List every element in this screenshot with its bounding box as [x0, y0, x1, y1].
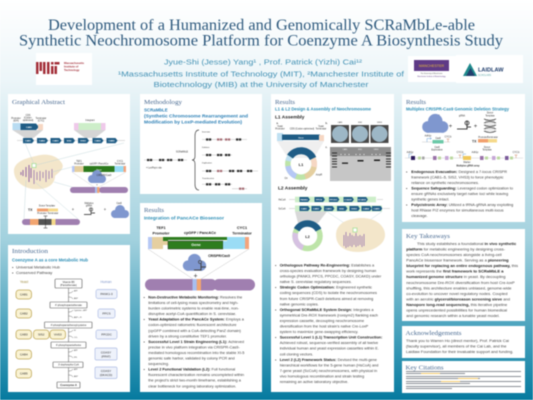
panel: introduction — [8, 245, 130, 392]
colony plates — [325, 121, 388, 143]
Cas9 icon: Cas9 — [116, 203, 122, 205]
heading: key takeaways: Key Takeaways — [406, 233, 450, 240]
icon: gRNA: gRNA — [459, 114, 466, 118]
L1 plasmid labels: Ori — [284, 177, 288, 180]
L1 plasmid labels: L1 — [299, 162, 304, 167]
acknowledgements body — [406, 338, 513, 354]
bullet list: neochromosome: native S. cerevisiae regulatory sequences. — [280, 280, 352, 284]
Cas9 expression cassette — [422, 134, 452, 152]
L1 construct: Promoter — [275, 128, 285, 130]
L1 plasmid labels — [284, 162, 323, 180]
bullet list: biosensor: Successful Level 1 Strain Engineering (L1): Achieved — [148, 340, 244, 344]
L2 gene rows: CAB3 — [326, 207, 332, 210]
cassette funnel left: optimized) — [23, 119, 34, 122]
citation lines — [406, 372, 521, 388]
Cas9 complex: + — [193, 273, 198, 280]
panel: biosensor results — [140, 203, 262, 392]
acknowledgements body: Thank you to Warren Ho (direct mentor), Prof. Patrick Cai — [406, 338, 509, 343]
bullet list: biosensor — [144, 296, 245, 388]
gel: SIS2 — [358, 149, 362, 151]
takeaways body: Nanopore long-read sequencing, this iterative pipeline — [406, 302, 508, 307]
title: Development of a Humanized and Genomically SCRaMbLe-able — [48, 17, 475, 34]
subheading: L1 & L2 Design & Assembly of Neochromosome — [275, 106, 372, 112]
human column: PANK1-3 — [100, 292, 113, 296]
human column: (DKACD) — [100, 373, 112, 377]
multiplex gRNA array: CYC1t — [457, 151, 464, 154]
yeast column: CAB2 — [20, 312, 28, 316]
multiplex gRNA array: Marker — [463, 161, 471, 164]
icon: donor DNA: + — [474, 124, 478, 130]
subheading: Integration of PancACe Biosensor — [144, 216, 224, 220]
bullet list: deletion strategy: reliance on synthetic neochromosomes. — [411, 181, 479, 185]
donor template — [28, 204, 75, 215]
SCRaMbLE diagram: Duplication — [202, 162, 212, 164]
bullet list: neochromosome: diversification from the host strain's native Cre-LoxP — [280, 324, 369, 328]
bullet list: neochromosome: orthologs (PANK3, PPCS, PPCDC, COASY, DCAKD) under — [280, 275, 382, 279]
biosensor construct: Gene — [96, 169, 103, 171]
gene arrow row: VHS3 — [80, 140, 87, 142]
donor template: Template — [482, 148, 492, 152]
donor template — [472, 136, 498, 152]
gene arrow row: SIS2 — [67, 140, 72, 142]
bullet list: biosensor: Level 2 Functional Validation (L2): Full functional — [148, 368, 235, 372]
human column: PPCDC — [101, 332, 113, 336]
bullet list: biosensor: • — [144, 296, 146, 300]
takeaways body: co-evolution to uncover novel regulatory nodes. Coupled — [406, 291, 508, 296]
bullet list: biosensor: Yeast Adaptation of the PancACe System: Employs a — [148, 318, 245, 322]
bullet list: neochromosome: vivo homologous recombination and strain testing — [280, 374, 364, 378]
Cas9 icon — [104, 203, 129, 218]
donor template: Terminator — [487, 136, 498, 139]
pathway: ADP — [74, 375, 79, 378]
bullet list: biosensor: (cpGFP combined with a CoA-detecting PanZ domain) — [148, 329, 242, 333]
pathway: Coenzyme A — [60, 383, 77, 387]
multiplex gRNA array: Adh1p — [472, 151, 479, 154]
pathway: ADP + Pi — [74, 316, 82, 319]
logo: MIT: Institute of — [64, 64, 78, 68]
gene arrow row: CAB1 — [25, 140, 32, 142]
L2 gene rows: VHS3 — [351, 208, 358, 210]
panel: graphical abstract — [8, 94, 130, 234]
biosensor construct: CRISPR/Cas9 — [97, 175, 112, 177]
cassette funnel left: (tDH) — [13, 120, 19, 122]
icon: Cas9: Cas9 — [434, 116, 440, 118]
SCRaMbLE diagram — [144, 130, 258, 190]
bullet list: Conserved Pathway — [16, 270, 53, 275]
bullet list: deletion strategy: host RNase P/Z enzymes for simultaneous multi-locus — [411, 208, 504, 212]
bullet list: deletion strategy: • — [406, 187, 408, 191]
takeaways body: opens unprecedented possibilities for human biomedical — [406, 308, 507, 312]
bullet list: biosensor: • — [144, 368, 146, 372]
gel — [326, 147, 391, 181]
biosensor construct: Promoter — [74, 162, 84, 166]
bullet list — [12, 264, 61, 275]
bullet list: neochromosome — [275, 264, 382, 384]
Cas9 complex: CRISPR/Cas9 — [208, 254, 230, 258]
SCRaMbLE definition: Modification by LoxP-mediated Evolution) — [144, 119, 243, 124]
L2 gene rows: SIS2 — [339, 208, 345, 210]
bullet list: neochromosome: symmetrical Dre-ROX framework (roxsym2) flanking each — [280, 313, 378, 317]
panel: key citations — [402, 361, 525, 393]
authors and affiliations: Biotechnology (MIB) at the University of Manchester — [154, 82, 369, 89]
authors and affiliations: Jyue-Shi (Jesse) Yang¹ , Prof. Patrick (Yizhi) Cai¹² — [164, 60, 363, 66]
Cas9 expression cassette: Cas9 — [435, 138, 441, 140]
bullet list: neochromosome: coli cloning vectors. — [280, 352, 313, 356]
construct labels: cpGFP / PancACe — [184, 231, 216, 235]
pathway: Vitamin B5 — [62, 281, 75, 284]
biosensor construct: + — [96, 184, 98, 186]
gRNA icon — [84, 202, 95, 214]
human column — [95, 280, 117, 378]
pathway: ATP — [74, 368, 78, 371]
gene arrow row: CAB5 — [109, 140, 115, 142]
bullet list: biosensor: codon-optimized ratiometric fluorescent architecture — [148, 323, 237, 327]
bullet list: neochromosome: Successful Level 1 (L1) Transcription Unit Construction: — [280, 336, 382, 340]
gel: VHS3 — [374, 149, 378, 151]
panel: neochromosome results — [271, 94, 394, 392]
yeast column — [16, 280, 66, 378]
takeaways body: platform for metabolic engineering by designing cross- — [406, 246, 506, 252]
bullet list: neochromosome: Level 2 (L2) Framework Status: Devised the multi-gene — [280, 358, 377, 362]
panel: acknowledgements — [402, 326, 525, 358]
pathway: PPi — [74, 357, 78, 359]
donor template: Terminator — [48, 212, 59, 215]
acknowledgements body: Laidlaw Foundation for their invaluable support and funding. — [406, 349, 513, 354]
donor template: Donor — [484, 146, 490, 149]
bullet list: biosensor: fluorescent characterization remains uncompleted within — [148, 373, 244, 377]
icon: donor DNA: Donor — [487, 112, 493, 114]
colony plates: VHS3 — [377, 122, 382, 124]
biosensor construct: Terminator — [115, 162, 126, 166]
heading: results: Results — [275, 99, 295, 106]
yeast column: Yeast — [20, 280, 28, 284]
takeaways body: species CoA neochromosomes alongside a living-cell — [406, 252, 502, 257]
SCRaMbLE definition — [144, 108, 248, 124]
pathway: Cysteine + ATP — [74, 309, 88, 312]
Cas9 expression cassette: Cas9 — [434, 147, 440, 149]
donor template: + — [72, 207, 75, 212]
icon: gRNA — [449, 114, 471, 130]
donor template: TX — [28, 208, 33, 212]
bullet list: neochromosome: expression cassette, decoupling neochromosome — [280, 319, 364, 323]
logo: MIT: Massachusetts — [64, 61, 84, 65]
Cas9 icon: + — [104, 207, 107, 212]
gel: c. — [326, 147, 328, 149]
SCRaMbLE definition: SCRaMbLE — [144, 108, 168, 112]
bullet list: biosensor: Non-Destructive Metabolic Monitoring: Resolves the — [148, 296, 242, 300]
bullet list: neochromosome: individual human and yeast expression cassettes within E. — [280, 347, 379, 351]
construct labels: Promoter — [153, 232, 170, 236]
takeaways body: humanized genome structure in yeast. By decoupling — [406, 274, 506, 279]
chromosome — [145, 279, 255, 290]
human column: Human — [101, 280, 112, 284]
multiplex gRNA array: Multiplex gRNA array — [456, 164, 480, 167]
bullet list: Universal Metabolic Hub — [16, 264, 61, 270]
L1 construct: CDS (Codon-optimized) — [290, 128, 314, 130]
bullet list: neochromosome: Strategic Codon Optimization: Engineered synthetic — [280, 286, 372, 290]
SCRaMbLE diagram: Inversion — [202, 132, 210, 134]
takeaways body: shuffling, this architecture enables unbiased, genome-wide — [406, 285, 512, 290]
gene construct — [148, 237, 249, 279]
Cas9 expression cassette: Expression — [431, 148, 443, 152]
bullet list: biosensor: limitations of cell-lysing mass spectrometry and high- — [148, 301, 239, 305]
L2 gene rows — [278, 197, 390, 229]
cassette funnel left: CAB1 — [26, 126, 33, 129]
cassette funnel left: CDS — [26, 115, 31, 117]
heading: results: Results — [144, 207, 164, 214]
chromosome: integration — [70, 187, 128, 193]
SCRaMbLE diagram: = LoxPsym site — [146, 166, 163, 170]
donor template: Promoter — [37, 212, 47, 215]
bullet list: biosensor: the project's strict two-month timeframe, establishing a — [148, 379, 242, 383]
gRNA icon: Multiplex — [84, 202, 94, 205]
bullet list: biosensor: sequencing. — [148, 362, 169, 366]
bullet list: deletion strategy: • — [406, 203, 408, 207]
yeast column: SIS2 — [38, 332, 45, 336]
bullet list: biosensor: driven by a strong constitutive TEF1 promoter. — [148, 334, 227, 338]
takeaways body: neochromosome Dre-ROX diversification from host Cre-loxP — [406, 280, 515, 285]
bullet list: neochromosome: • — [275, 286, 277, 290]
logo: MIT: Technology — [64, 68, 80, 72]
construct labels: CYC1 — [237, 226, 247, 230]
logo: Manchester: MANCHESTER — [419, 64, 444, 68]
biosensor construct: TEF1 — [76, 161, 83, 163]
bullet list: biosensor: • — [144, 340, 146, 344]
bullet list: deletion strategy: framework (CAB1–5, SIS2, VHS3) to force phenotypic — [411, 176, 503, 180]
L1 assembly heading: L1 Assembly — [275, 114, 305, 120]
yeast column: CAB5 — [20, 372, 28, 376]
heading: acknowledgements: Acknowledgements — [406, 330, 462, 337]
biosensor construct — [72, 161, 126, 187]
bullet list: deletion strategy: synthetic genes intact. — [411, 198, 449, 202]
yeast column: CAB3 — [20, 332, 28, 336]
construct labels: TEF1 — [156, 226, 166, 230]
colony plates: SIS2 — [358, 122, 362, 124]
colony plates: b. — [325, 123, 328, 125]
biosensor construct: cpGFP / PancACe — [90, 162, 109, 166]
bullet list: biosensor: burden colorimetric systems to enable real-time, non- — [148, 307, 240, 311]
bullet list: neochromosome: system to maximize gene-swapping efficiency. — [280, 330, 358, 334]
bullet list: deletion strategy: cleavage. — [411, 214, 428, 218]
L2 gene rows: CAB5 — [374, 207, 380, 210]
multiplex gRNA array — [405, 151, 523, 167]
Cas9 expression cassette: CYC1t — [445, 136, 452, 138]
L1 construct: Yeast — [318, 125, 324, 128]
bullet list: deletion strategy: • — [406, 170, 408, 174]
bullet list: biosensor: • — [144, 318, 146, 322]
colony plates: CAB1 — [338, 121, 342, 124]
bullet list: deletion strategy: ensure gRNAs exclusively target native loci while leaving — [411, 192, 508, 196]
bullet list: neochromosome: remaining an active laboratory objective. — [280, 380, 349, 384]
logo: Manchester: Manchester Institute of Biotechnology — [417, 75, 446, 78]
logo: Laidlaw — [456, 55, 523, 83]
authors and affiliations — [118, 60, 404, 89]
donor template: Donor Template — [39, 204, 56, 208]
L1 construct: Gene — [298, 138, 305, 140]
yeast column: CAB1 — [20, 292, 28, 296]
logo: MIT — [36, 53, 92, 85]
pathway: 4'-phosphopantothenoylcysteine — [51, 324, 87, 327]
bullet list: biosensor: mediated homologous recombination into the stable XI-5 — [148, 351, 244, 355]
L1 construct: Terminator — [316, 128, 327, 130]
construct labels — [153, 226, 252, 236]
Cas9 complex — [183, 254, 230, 280]
gene arrow row: CAB3 — [53, 140, 59, 142]
human column: COASY — [101, 350, 111, 354]
backbone funnel right: Integrant — [85, 119, 95, 122]
heading: key citations: Key Citations — [406, 364, 444, 372]
takeaways body: blueprint for replacing an entire endogenous pathway, this — [406, 263, 518, 268]
yeast column: CAB4 — [20, 352, 28, 356]
takeaways body: with an aerobic glycerol/bioreason screening sieve and — [406, 296, 510, 301]
logo: Manchester — [408, 56, 456, 82]
bullet list: neochromosome: • — [275, 264, 277, 268]
icon: donor DNA: Template — [485, 114, 495, 118]
construct labels: Terminator — [232, 232, 252, 236]
yeast cell: L2 — [336, 218, 385, 252]
icon: gRNA: + — [449, 124, 453, 130]
panel: key takeaways — [402, 229, 525, 321]
pathway: 4'-phosphopantothenate — [55, 304, 83, 307]
takeaways body: work represents the first framework to SCRaMbLE a — [406, 269, 504, 274]
human column: (PPAT) — [101, 354, 111, 358]
bullet list: neochromosome: from future CRISPR-Cas9 deletions aimed at removing — [280, 297, 373, 301]
bullet list: • — [12, 270, 14, 275]
bullet list: neochromosome: cross-species evaluation framework by designing human — [280, 269, 376, 273]
yeast column: VHS3 — [54, 332, 62, 336]
multiplex gRNA array: CYC1t — [513, 151, 520, 154]
bullet list: neochromosome: 7-gene yeast (ScCoA) neochromosomes, with physical in — [280, 369, 377, 373]
SCRaMbLE definition: (Synthetic Chromosome Rearrangement and — [144, 114, 248, 118]
bullet list: neochromosome: • — [275, 308, 277, 312]
L2 gene rows: COASY — [344, 198, 352, 201]
donor template: TX — [472, 140, 477, 144]
bullet list: deletion strategy: Endogenous Evacuation: Designed a 7-locus CRISPR — [411, 170, 507, 174]
takeaways body — [406, 241, 518, 318]
biosensor construct: CYC1 — [117, 161, 124, 163]
gene arrow row: CAB2 — [39, 140, 46, 142]
cassette funnel left: Promoter — [11, 117, 21, 120]
SCRaMbLE diagram: Translocation — [202, 177, 214, 180]
L2 plasmid label: L2 — [305, 235, 310, 239]
cassette funnel left: Terminator — [36, 117, 47, 120]
yeast cell with chromosomes — [14, 143, 124, 219]
bullet list: biosensor: disruptive acetyl-CoA quantification in S. cerevisiae. — [148, 312, 236, 316]
pathway: CO₂ — [74, 337, 78, 339]
L1 plasmid ring — [288, 151, 314, 177]
pathway: H⁺ — [74, 329, 76, 332]
L2 gene rows: PANK3 — [300, 198, 308, 201]
bullet list: neochromosome: Orthologous Pathway Re-Engineering: Establishes a — [280, 264, 375, 268]
gel: CAB1 — [343, 148, 347, 151]
L1 construct — [275, 123, 327, 158]
gene arrow row: CAB4 — [95, 140, 101, 142]
chromosome: deletion — [22, 216, 80, 228]
title — [19, 17, 503, 50]
L2 plasmid ring — [295, 223, 320, 248]
cassette funnel left: (Codon- — [24, 118, 32, 120]
bullet list: biosensor: clear bottleneck for ongoing laboratory optimization. — [148, 384, 236, 388]
cassette funnel left — [11, 115, 47, 138]
L2 gene rows: CAB1 — [301, 207, 308, 210]
cassette funnel left: (CYC) — [38, 120, 44, 122]
bullet list: biosensor: precise in vivo platform integration via CRISPR-Cas9- — [148, 345, 240, 349]
L2 gene rows: PPCDC — [330, 199, 338, 201]
Cas9 expression cassette: Adh1p — [425, 134, 432, 138]
bullet list: neochromosome: coding sequences (CDS) to isolate the neochromosomes — [280, 291, 377, 295]
L1 plasmid labels: AmpR — [316, 174, 323, 176]
bullet list: neochromosome: Achieved robust, sequence-verified assembly of all twelve — [280, 341, 378, 345]
icon: donor DNA — [474, 112, 496, 132]
L2 gene rows: PPCS — [316, 199, 323, 201]
panel: deletion strategy results — [402, 94, 525, 222]
takeaways body: and genomic research within a tunable yeast model. — [406, 313, 500, 318]
authors and affiliations: ¹Massachusetts Institute of Technology (MIT), ²Manchester Institute of — [118, 72, 404, 78]
heading: introduction: Introduction — [12, 248, 49, 255]
bullet list: neochromosome: Orthogonal SCRaMbLE System Design: Integrates a — [280, 308, 374, 312]
pathway: ADP — [74, 297, 79, 300]
logo: Manchester: The University of Manchester — [421, 72, 443, 75]
heading: methodology: Methodology — [144, 99, 183, 106]
subheading: Multiplex CRISPR-Cas9 Genomic Deletion Strategy — [406, 106, 510, 112]
SCRaMbLE diagram: SCRaMbLE — [176, 152, 189, 154]
bullet list: • — [12, 264, 14, 270]
bullet list: deletion strategy — [406, 170, 513, 218]
pathway: ATP — [74, 290, 78, 292]
pathway: 4'-phosphopantetheine — [56, 344, 82, 347]
pathway: ATP — [74, 349, 78, 352]
panel: methodology — [140, 94, 262, 194]
subheading: Coenzyme A as a core Metabolic Hub — [12, 258, 88, 262]
human column: COASY — [101, 369, 111, 373]
pathway — [44, 279, 92, 388]
bullet list: neochromosome: hierarchical workflows for the 5-gene human (HsCoA) and — [280, 363, 378, 367]
pathway: 3'-dephospho-CoA — [58, 364, 79, 367]
gene construct: Gene — [191, 243, 201, 247]
bullet list: neochromosome: native genomic copies. — [280, 302, 319, 306]
L1 construct: a. — [277, 123, 279, 125]
L2 gene rows: CAB2 — [313, 207, 320, 210]
heading: results: Results — [406, 99, 426, 106]
pathway: (Pantothenate) — [60, 284, 77, 287]
gene arrow row — [17, 138, 125, 143]
gRNA icon: gRNA — [86, 204, 93, 208]
takeaways body: PancACe biosensor framework. Serving as a pioneering — [406, 258, 509, 263]
donor template: Promoter — [478, 136, 488, 139]
L2 gene rows: CAB4 — [363, 207, 370, 210]
acknowledgements body: (faculty supervisor), all members of the Cai Lab, and the — [406, 344, 507, 348]
logo: Laidlaw: LAIDLAW — [478, 68, 504, 74]
title: Synthetic Neochromosome Platform for Coenzyme A Biosynthesis Study — [19, 32, 503, 50]
bullet list: biosensor: genomic safe harbor, validated by colony PCR and — [148, 356, 235, 360]
SCRaMbLE diagram: Deletion — [202, 146, 209, 149]
bullet list: neochromosome: • — [275, 358, 277, 362]
L1 construct: Yeast — [277, 125, 283, 128]
L2 gene rows: HsCoA — [278, 198, 286, 202]
human column: PPCS — [102, 312, 111, 316]
bullet list: deletion strategy: Polycistronic Array: Utilized a tRNA-gRNA array exploiting — [411, 203, 513, 207]
L2 gene rows: ScCoA — [278, 208, 286, 210]
logo: Laidlaw: SCHOLARS — [478, 74, 492, 77]
bullet list: deletion strategy: Sequence Safeguarding: Leveraged codon optimization to — [411, 187, 513, 191]
bullet list: neochromosome: • — [275, 336, 277, 340]
L2 gene rows: DCAKD — [358, 198, 366, 201]
takeaways body: This study establishes a foundational in vivo synthetic — [417, 241, 517, 246]
L2 assembly heading: L2 Assembly — [278, 186, 308, 192]
multiplex gRNA array: Adh1p — [407, 151, 414, 154]
heading: graphical abstract: Graphical Abstract — [12, 99, 65, 106]
